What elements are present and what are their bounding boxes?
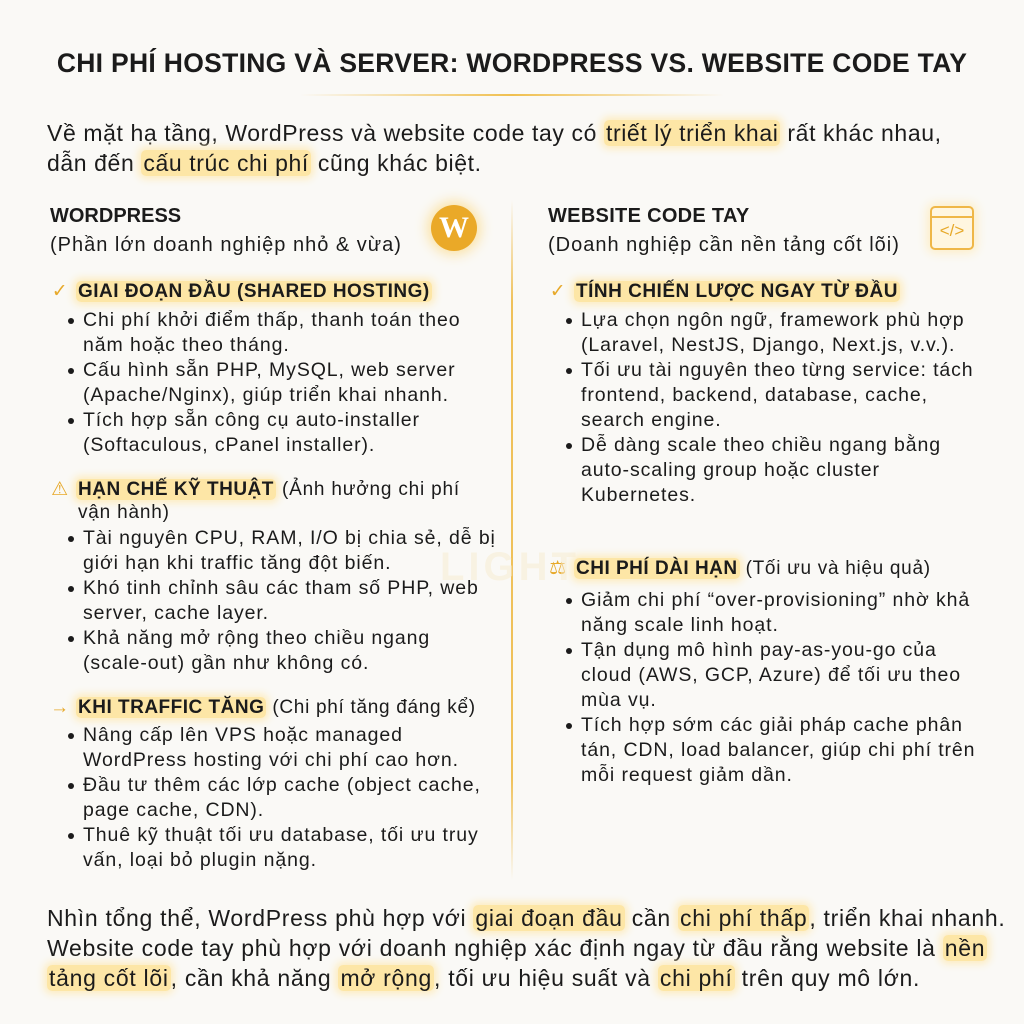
bullets: chien luoc: (Laravel, NestJS, Django, Next.js, v.v.). [581, 334, 955, 356]
bullets: han che: (scale-out) gần như không có. [83, 652, 369, 674]
section: tinh chien luoc: TÍNH CHIẾN LƯỢC NGAY TỪ ĐẦU [576, 281, 898, 302]
bullets: traffic [68, 724, 481, 871]
bullets: giai doan dau: Tích hợp sẵn công cụ auto-installer [83, 409, 420, 431]
conclusion: Website code tay phù hợp với doanh nghiệp xác định ngay từ đầu rằng website là nền [47, 935, 985, 961]
conclusion [40, 898, 1006, 998]
bullets: dai han: Tận dụng mô hình pay-as-you-go của [581, 639, 937, 661]
bullets: han che: giới hạn khi traffic tăng đột biến. [83, 552, 391, 574]
bullets: han che: Khó tinh chỉnh sâu các tham số PHP, web [83, 577, 479, 599]
panel: code header: WEBSITE CODE TAY [548, 205, 750, 227]
section: chi phi dai han: CHI PHÍ DÀI HẠN (Tối ưu và hiệu quả) [576, 558, 931, 579]
title underline [300, 94, 724, 96]
bullets: traffic: WordPress hosting với chi phí cao hơn. [83, 749, 459, 771]
bullets: chien luoc: search engine. [581, 409, 722, 431]
section: khi traffic tang [50, 690, 476, 725]
section: tinh chien luoc: ✓ [550, 281, 566, 302]
icon: wordpress: W [439, 211, 469, 244]
panel: wordpress header: WORDPRESS [50, 205, 181, 227]
watermark: LIGHT [440, 545, 580, 589]
intro text: Về mặt hạ tầng, WordPress và website code tay có triết lý triển khai rất khác nhau, [47, 120, 942, 146]
section: chi phi dai han [549, 551, 931, 586]
conclusion: Nhìn tổng thể, WordPress phù hợp với giai đoạn đầu cần chi phí thấp, triển khai nhanh. [47, 905, 1006, 931]
title: CHI PHÍ HOSTING VÀ SERVER: WORDPRESS VS. WEBSITE CODE TAY [57, 48, 967, 78]
section: han che ky thuat [51, 472, 460, 523]
panel: wordpress header: (Phần lớn doanh nghiệp nhỏ & vừa) [50, 234, 402, 256]
bullets: chien luoc: Lựa chọn ngôn ngữ, framework phù hợp [581, 309, 965, 331]
section: tinh chien luoc [550, 274, 907, 309]
conclusion: tảng cốt lõi, cần khả năng mở rộng, tối ưu hiệu suất và chi phí trên quy mô lớn. [49, 965, 920, 991]
section: han che ky thuat: ⚠ [51, 479, 69, 500]
section: chi phi dai han: ⚖ [549, 558, 567, 579]
bullets: dai han: Giảm chi phí “over-provisioning” nhờ khả [581, 589, 970, 611]
intro text: dẫn đến cấu trúc chi phí cũng khác biệt. [47, 150, 482, 176]
divider [511, 200, 513, 880]
bullets: traffic: Đầu tư thêm các lớp cache (object cache, [83, 774, 481, 796]
bullets: han che [68, 527, 496, 674]
bullets: chien luoc: auto-scaling group hoặc cluster [581, 459, 880, 481]
section: khi traffic tang: → [50, 697, 70, 718]
bullets: han che: Khả năng mở rộng theo chiều ngang [83, 627, 430, 649]
bullets: traffic: page cache, CDN). [83, 799, 264, 821]
panel: code header [548, 205, 900, 256]
bullets: dai han: năng scale linh hoạt. [581, 614, 779, 636]
bullets: giai doan dau: Cấu hình sẵn PHP, MySQL, web server [83, 359, 456, 381]
bullets: traffic: Nâng cấp lên VPS hoặc managed [83, 724, 403, 746]
panel: wordpress header [50, 205, 402, 256]
panel: code header: (Doanh nghiệp cần nền tảng cốt lõi) [548, 234, 900, 256]
bullets: chien luoc: Kubernetes. [581, 484, 696, 506]
bullets: giai doan dau: (Softaculous, cPanel installer). [83, 434, 375, 456]
bullets: dai han: tán, CDN, load balancer, giúp chi phí trên [581, 739, 975, 761]
icon: code window: </> [940, 221, 964, 240]
section: khi traffic tang: KHI TRAFFIC TĂNG (Chi phí tăng đáng kể) [78, 697, 476, 718]
bullets: traffic: Thuê kỹ thuật tối ưu database, tối ưu truy [83, 824, 479, 846]
bullets: chien luoc: Dễ dàng scale theo chiều ngang bằng [581, 434, 941, 456]
bullets: dai han: cloud (AWS, GCP, Azure) để tối ưu theo [581, 664, 961, 686]
icon: wordpress [431, 205, 477, 251]
section: giai doan dau: GIAI ĐOẠN ĐẦU (SHARED HOSTING) [78, 281, 430, 302]
bullets: giai doan dau: Chi phí khởi điểm thấp, thanh toán theo [83, 309, 460, 331]
bullets: han che: Tài nguyên CPU, RAM, I/O bị chia sẻ, dễ bị [83, 527, 496, 549]
intro text [47, 113, 942, 183]
bullets: giai doan dau [68, 309, 460, 456]
bullets: dai han: mùa vụ. [581, 689, 657, 711]
bullets: dai han: mỗi request giảm dần. [581, 764, 793, 786]
section: han che ky thuat: vận hành) [78, 502, 170, 523]
bullets: dai han [566, 589, 975, 786]
bullets: giai doan dau: (Apache/Nginx), giúp triển khai nhanh. [83, 384, 449, 406]
section: giai doan dau: ✓ [52, 281, 68, 302]
bullets: chien luoc [566, 309, 974, 506]
bullets: chien luoc: Tối ưu tài nguyên theo từng service: tách [581, 359, 974, 381]
section: han che ky thuat: HẠN CHẾ KỸ THUẬT (Ảnh hưởng chi phí [78, 479, 460, 500]
bullets: giai doan dau: năm hoặc theo tháng. [83, 334, 290, 356]
bullets: dai han: Tích hợp sớm các giải pháp cache phân [581, 714, 963, 736]
bullets: han che: server, cache layer. [83, 602, 269, 624]
bullets: chien luoc: frontend, backend, database, cache, [581, 384, 928, 406]
section: giai doan dau [52, 274, 439, 309]
bullets: traffic: vấn, loại bỏ plugin nặng. [83, 849, 317, 871]
icon: code window [930, 206, 974, 250]
